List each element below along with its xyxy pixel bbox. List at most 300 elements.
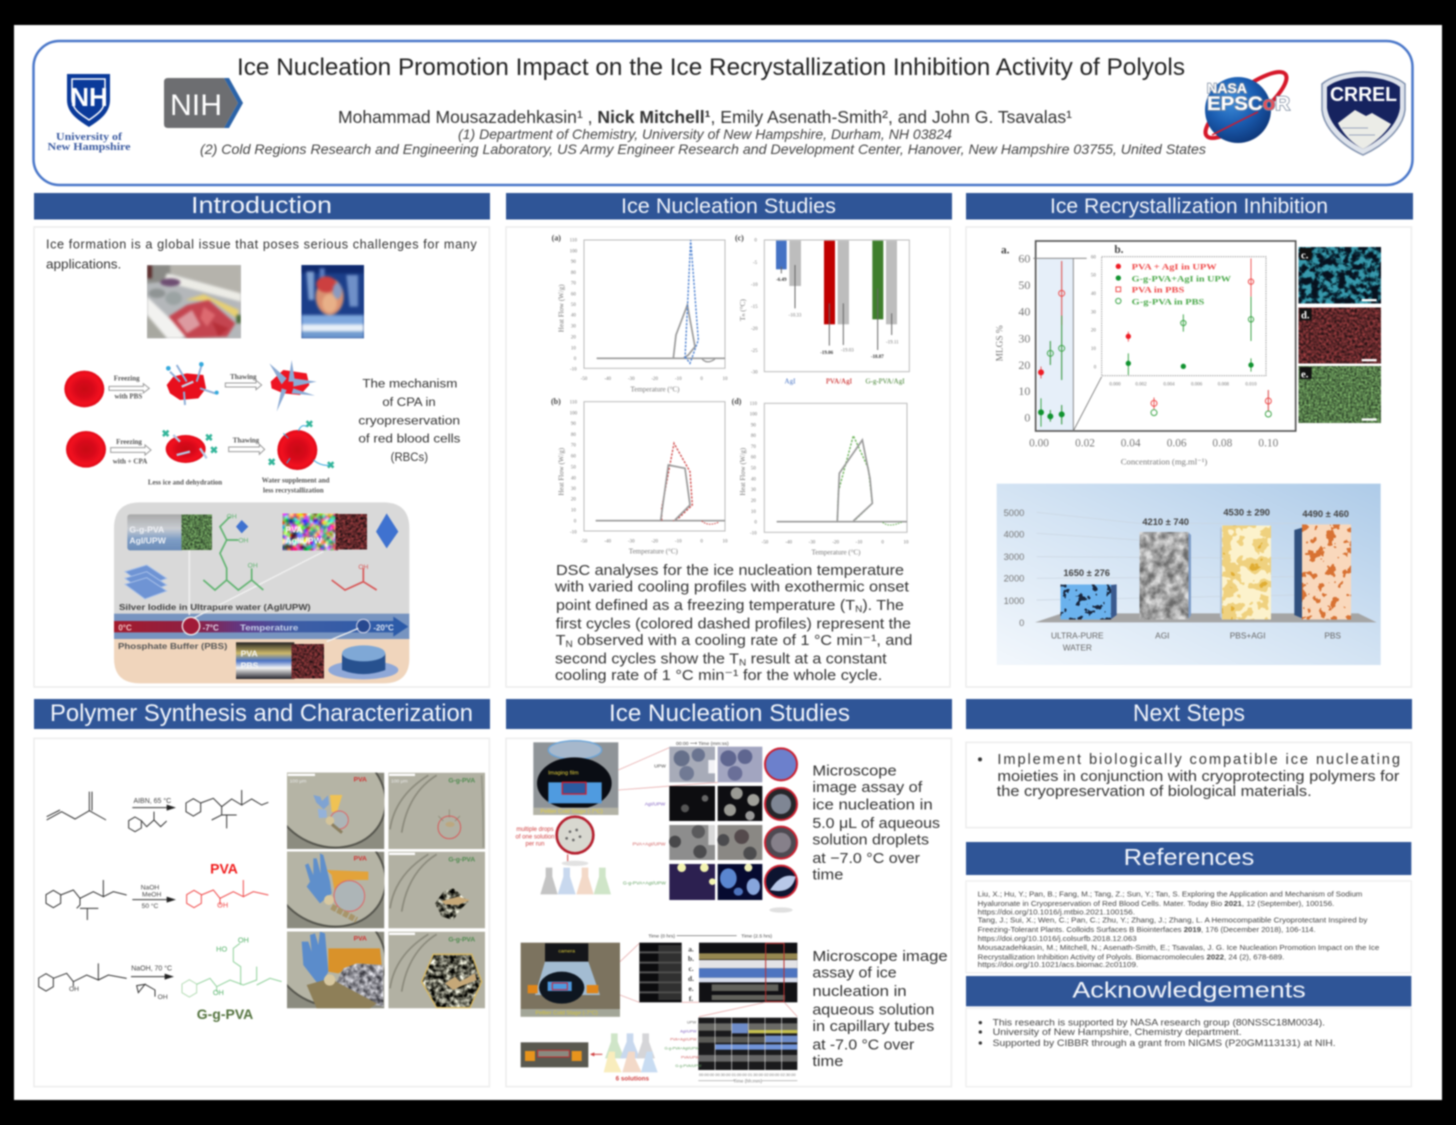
chart: MLGS vs concentration: 0.04 — [1121, 437, 1141, 449]
text: droplet assay: solution droplets — [812, 833, 929, 849]
diagram: RBC mechanism without CPA: Freezing — [114, 375, 140, 383]
chart: MLGS vs concentration: 0.10 — [1258, 437, 1279, 449]
chart: MLGS vs concentration — [995, 241, 1296, 466]
authors: Mohammad Mousazadehkasin¹ , Nick Mitchell¹, Emily Asenath-Smith², and John G. Tsavalas¹ — [338, 107, 1072, 127]
caption: DSC analyses: second cycles show the T — [555, 650, 726, 667]
chart b: DSC: 10 — [723, 539, 728, 544]
references list: Tang, J.; Sui, X.; Wen, C.; Pan, C.; Zhu, Y.; Zhang, J.; Zhang, L. A Hemocompatible Cryoprotectant Inspired by — [978, 916, 1368, 925]
image: PVA PBS: PVA — [241, 649, 259, 659]
text: droplet assay: Microscope — [812, 763, 897, 779]
chart: MLGS vs concentration: b. — [1114, 244, 1124, 256]
chart: MLGS vs concentration: 0.00 — [1029, 437, 1049, 449]
capillary tube images: c. — [688, 964, 694, 973]
chart: nucleation bars: PBS+AGI — [1230, 631, 1266, 641]
section header: Introduction — [34, 192, 490, 220]
micrograph d: d. — [1301, 311, 1310, 322]
capillary tube images: a. — [688, 945, 694, 954]
chart: nucleation bars: 0 — [1019, 618, 1024, 628]
label: G-g-PVA: G-g-PVA — [197, 1006, 253, 1022]
references list — [966, 881, 1411, 973]
caption: DSC analyses: DSC analyses for the ice nucleation temperature — [556, 562, 904, 579]
chart b: DSC: 50 — [571, 465, 576, 470]
chart b: DSC: (b) — [551, 397, 561, 406]
capillary tube images: f. — [689, 994, 693, 1003]
section header: Ice Nucleation Studies: Ice Nucleation Studies — [621, 195, 836, 218]
chart a: DSC: 100 — [570, 249, 578, 254]
section header: Ice Recrystallization Inhibition: Ice Recrystallization Inhibition — [1050, 195, 1328, 218]
intro text: applications. — [46, 257, 121, 271]
chart b: DSC: 0 — [574, 519, 577, 524]
acknowledgements list: University of New Hampshire, Chemistry department. — [993, 1027, 1242, 1037]
diagram: RBC mechanism with CPA: Thawing — [233, 436, 260, 444]
ice crystals — [236, 520, 248, 533]
references list: Freezing-Tolerant Plants. Colloids Surfaces B Biointerfaces 2019, 176 (December 2018), 106-114. — [978, 925, 1316, 934]
acknowledgements heading — [966, 976, 1411, 1006]
diagram: RBC mechanism with CPA: ✖ — [161, 429, 170, 440]
chart d: DSC: -10 — [750, 532, 757, 537]
diagram: RBC mechanism with CPA — [66, 420, 335, 495]
chart a: DSC: Temperature (°C) — [630, 385, 680, 393]
droplet image grid: G-g-PVA+AgI/UPW — [623, 881, 666, 887]
chart c: TN bars: Tₙ (°C) — [738, 298, 747, 321]
diagram: RBC mechanism without CPA: Thawing — [230, 373, 257, 381]
chart d: DSC: 60 — [751, 456, 756, 461]
legend — [1116, 262, 1231, 306]
setup photo: droplets: multiple drops — [516, 827, 554, 833]
chart b: DSC: -40 — [604, 539, 611, 544]
chart c: TN bars: -20 — [751, 327, 758, 332]
references heading: References — [1124, 844, 1254, 870]
micrographs: PVA: 100 μm — [290, 779, 306, 785]
legend: PVA + AgI in UPW — [1132, 262, 1217, 272]
chart: MLGS vs concentration: 0.02 — [1075, 437, 1095, 449]
text: droplet assay: at −7.0 °C over — [812, 851, 920, 867]
caption: DSC analyses: N — [566, 639, 573, 649]
diagram: RBC mechanism with CPA: Freezing — [116, 438, 142, 446]
capillary tube images: Time (2.5 hrs) — [741, 934, 772, 940]
diagram: ice nucleation vs temperature: OH — [358, 564, 369, 571]
diagram: RBC mechanism without CPA — [64, 360, 317, 412]
chart: MLGS vs concentration: 60 — [1018, 251, 1030, 265]
text: droplet assay: 5.0 μL of aqueous — [812, 816, 940, 832]
micrograph e — [1299, 366, 1381, 423]
setup photo: capillary tubes — [521, 943, 620, 1017]
droplet image grid — [623, 741, 762, 900]
capillary time series: PVA+AgI/UPW — [670, 1037, 697, 1042]
header banner — [34, 41, 1412, 185]
caption: mechanism of CPA: The mechanism — [362, 377, 457, 391]
chart a: DSC: 0 — [574, 357, 577, 362]
next steps text: Implement biologically compatible ice nucleating — [997, 752, 1400, 768]
micrographs: G-g-PVA — [388, 773, 485, 1008]
diagram: ice nucleation vs temperature: OH — [227, 513, 237, 520]
chart d: DSC: 10 — [904, 540, 909, 545]
chart d: DSC: 90 — [751, 423, 756, 428]
chart b: DSC: Temperature (°C) — [629, 548, 679, 556]
reaction 3: grafting: NaOH, 70 °C — [131, 965, 172, 973]
chart d: DSC: Temperature (°C) — [811, 549, 861, 557]
chart: nucleation bars: WATER — [1063, 643, 1092, 653]
temperature arrow: Temperature — [240, 623, 299, 632]
diagram: RBC mechanism with CPA: ✖ — [267, 458, 276, 469]
inset chart: 0.000 — [1109, 383, 1121, 388]
chart c: TN bars — [735, 234, 909, 386]
logo: University of New Hampshire: New Hampshire — [48, 142, 131, 153]
chart d: DSC: 100 — [750, 413, 758, 418]
reaction 2: hydrolysis: OH — [217, 901, 228, 910]
caption: DSC analyses: observed with a cooling rate of 1 °C min⁻¹, and — [573, 632, 912, 649]
chart d: DSC: -40 — [785, 540, 792, 545]
image: G-g-PVA: G-g-PVA — [129, 524, 165, 534]
capillary time series: Time (hh:mm) — [733, 1079, 763, 1084]
acknowledgements list: Supported by CIBBR through a grant from NIGMS (P20GM113131) at NIH. — [993, 1038, 1336, 1048]
chart a: DSC: -10 — [570, 368, 577, 373]
chart: MLGS vs concentration: 0.08 — [1212, 437, 1233, 449]
diagram: RBC mechanism with CPA: ✖ — [205, 433, 213, 444]
chart: MLGS vs concentration: 10 — [1018, 384, 1030, 398]
data points — [1038, 261, 1271, 427]
chart: nucleation bars: 4210 ± 740 — [1142, 517, 1189, 527]
chart b: DSC: 0 — [700, 539, 703, 544]
chart b: DSC: Heat Flow (W/g) — [558, 447, 566, 496]
chart c: TN bars: -10.33 — [789, 314, 802, 319]
text: droplet assay: ice nucleation in — [812, 798, 933, 814]
chart d: DSC — [732, 397, 909, 557]
micrographs: PVA: PVA — [354, 856, 367, 863]
chart c: TN bars: -19.11 — [886, 340, 899, 345]
affiliation 2: (2) Cold Regions Research and Engineering Laboratory, US Army Engineer Research and Development Center, Hanover, New Hampshire 03755, United States — [200, 141, 1206, 157]
setup photo: capillary tubes: camera — [558, 948, 575, 954]
logo: NASA EPSCoR: NASA — [1207, 80, 1247, 96]
chart: nucleation bars: PBS — [1324, 631, 1341, 641]
chart a: DSC: 20 — [571, 335, 576, 340]
logo: NIH: NIH — [170, 89, 222, 122]
text: droplet assay: time — [812, 868, 843, 884]
setup photo: droplets: per run — [526, 841, 544, 847]
section header: Next Steps: Next Steps — [1133, 700, 1245, 727]
chart c: TN bars: -18.87 — [871, 355, 884, 360]
reaction 2: hydrolysis: 50 °C — [142, 902, 159, 910]
chart d: DSC: 80 — [751, 434, 756, 439]
text: capillary assay: nucleation in — [812, 984, 907, 1000]
logo: NASA EPSCoR — [1197, 62, 1295, 148]
caption: DSC analyses — [554, 562, 912, 684]
logo: NASA EPSCoR: EPSCoR — [1207, 94, 1290, 115]
diagram: ice nucleation vs temperature: OH — [248, 563, 258, 570]
chart a: DSC: 110 — [570, 239, 577, 244]
chart b: DSC: -50 — [581, 539, 588, 544]
reaction 1: RAFT polymerization — [47, 790, 268, 832]
chart b: DSC — [551, 397, 728, 556]
chart a: DSC: (a) — [552, 234, 561, 243]
panel: next steps, references, acknowledgements — [966, 742, 1411, 1087]
chart c: TN bars: G-g-PVA/AgI — [865, 378, 905, 386]
caption: mechanism of CPA: of CPA in — [382, 395, 436, 409]
diagram: ice nucleation vs temperature — [114, 502, 409, 683]
chart d: DSC: 70 — [751, 445, 756, 450]
chart d: DSC: Heat Flow (W/g) — [739, 447, 747, 496]
label: silver iodide: Silver Iodide in Ultrapure water (AgI/UPW) — [119, 602, 311, 612]
chart c: TN bars: 0 — [754, 239, 757, 244]
chart d: DSC: -30 — [809, 540, 816, 545]
capillary tube images — [639, 934, 797, 1003]
chart a: DSC: -40 — [604, 377, 611, 382]
diagram: RBC mechanism with CPA: less recrystallization — [263, 487, 324, 495]
references list: Mousazadehkasin, M.; Mitchell, N.; Asenath-Smith, E.; Tsavalas, J. G. Ice Nucleation Promotion Impact on the Ice — [978, 943, 1379, 952]
chart a: DSC: 10 — [571, 346, 576, 351]
micrograph c: c. — [1301, 250, 1309, 261]
chart: MLGS vs concentration: 40 — [1018, 305, 1030, 319]
chart a: DSC: 90 — [571, 260, 576, 265]
capillary time series: G-g-PVA+AgI/UPW — [664, 1046, 699, 1051]
chart: nucleation bars: 3000 — [1004, 552, 1024, 562]
image: G-g-PVA — [127, 514, 212, 550]
capillary time series: AgI/UPW — [680, 1028, 697, 1033]
chart d: DSC: 30 — [751, 488, 756, 493]
chart b: DSC: 30 — [571, 487, 576, 492]
panel: polymer synthesis — [34, 726, 489, 1087]
legend: G-g-PVA+AgI in UPW — [1132, 273, 1231, 283]
setup photo: droplets: Imaging film — [548, 770, 579, 776]
references list: https://doi.org/10.1016/j.mtbio.2021.100156. — [978, 907, 1135, 916]
next steps text: moieties in conjunction with cryoprotecting polymers for — [997, 769, 1399, 785]
inset chart: 40 — [1091, 292, 1096, 297]
acknowledgements heading: Acknowledgements — [1072, 978, 1306, 1003]
chart b: DSC: -10 — [570, 530, 577, 535]
chart d: DSC: 10 — [751, 510, 756, 515]
chart a: DSC: 40 — [571, 314, 576, 319]
chart: MLGS vs concentration: 0.06 — [1167, 437, 1187, 449]
inset chart: 60 — [1091, 255, 1096, 260]
chart c: TN bars: -10 — [751, 283, 758, 288]
chart b: DSC: 10 — [571, 509, 576, 514]
affiliation 1: (1) Department of Chemistry, University of New Hampshire, Durham, NH 03824 — [458, 126, 952, 142]
chart: nucleation bars: 5000 — [1004, 508, 1024, 518]
micrographs: PVA — [255, 726, 403, 1025]
inset chart: 0.008 — [1218, 383, 1229, 388]
caption: DSC analyses: with varied cooling profiles with exothermic onset — [554, 579, 910, 596]
structure: G-g-PVA — [203, 517, 263, 590]
chart d: DSC: 40 — [751, 477, 756, 482]
diagram: RBC mechanism with CPA: Water supplement and — [262, 477, 330, 485]
section header: Ice Nucleation Studies — [506, 193, 952, 220]
chart c: TN bars: PVA/AgI — [826, 378, 853, 386]
micrographs: PVA: PVA — [354, 777, 367, 784]
caption: DSC analyses: N — [855, 604, 862, 614]
reaction 3: grafting: OH — [238, 935, 249, 944]
setup photo: capillary tubes: Peltier Cold Stage (-7°C) — [536, 1010, 598, 1016]
chart a: DSC: Heat Flow (W/g) — [558, 284, 566, 332]
icon: flasks, 6 solutions: 6 solutions — [616, 1076, 650, 1083]
section header: Ice Nucleation Studies: Ice Nucleation Studies — [609, 700, 850, 727]
capillary time series: 00:00:00 00:30:00 01:00:00 01:30:00 02:00:00 02:30:00 — [699, 1072, 796, 1077]
chart b: DSC: 60 — [571, 455, 576, 460]
caption: DSC analyses: N — [739, 657, 746, 667]
image: PVA — [283, 514, 367, 550]
chart a: DSC: -10 — [675, 377, 682, 382]
chart b: DSC: -30 — [628, 539, 635, 544]
text: capillary assay: assay of ice — [812, 966, 897, 982]
acknowledgements list: This research is supported by NASA research group (80NSSC18M0034). — [993, 1018, 1325, 1028]
chart a: DSC: 60 — [571, 292, 576, 297]
chart c: TN bars: -6.49 — [776, 278, 787, 283]
next steps text — [966, 742, 1411, 828]
logo: University of New Hampshire: University of — [56, 132, 123, 143]
inset chart: 30 — [1091, 310, 1096, 315]
caption: mechanism of CPA: cryopreservation — [358, 413, 460, 427]
chart b: DSC: -20 — [651, 539, 658, 544]
chart b: DSC: 70 — [571, 444, 576, 449]
chart a: DSC: -20 — [651, 377, 658, 382]
chart b: DSC: 20 — [571, 498, 576, 503]
chart: nucleation bars: 4530 ± 290 — [1223, 508, 1270, 518]
chart d: DSC: 50 — [751, 466, 756, 471]
setup photo: droplets — [516, 741, 618, 866]
inset chart: 20 — [1091, 329, 1096, 334]
caption: mechanism of CPA — [358, 377, 460, 464]
references list: Hyaluronate in Cryopreservation of Red Blood Cells. Mater. Today Bio 2021, 12 (September), 100156. — [978, 899, 1334, 908]
chart: nucleation bars: 1000 — [1004, 596, 1024, 606]
diagram: RBC mechanism without CPA: with PBS — [114, 393, 142, 401]
icon: flasks — [540, 868, 611, 894]
references list: Liu, X.; Hu, Y.; Pan, B.; Fang, M.; Tang, Z.; Sun, Y.; Tan, S. Exploring the Application and Mechanism of Sodium — [978, 890, 1362, 899]
micrographs: G-g-PVA: 100 μm — [391, 779, 408, 785]
logo: University of New Hampshire — [48, 74, 131, 153]
caption: mechanism of CPA: of red blood cells — [358, 432, 460, 446]
capillary tube images: b. — [688, 954, 694, 963]
references list: https://doi.org/10.1016/j.colsurfb.2018.12.063 — [978, 934, 1137, 943]
temperature arrow: 0°C — [118, 623, 132, 632]
text: capillary assay: aqueous solution — [812, 1002, 934, 1018]
capillary tube images: e. — [688, 984, 694, 993]
text: capillary assay: Microscope image — [812, 949, 948, 965]
references heading — [966, 842, 1411, 875]
image: G-g-PVA: AgI/UPW — [129, 535, 167, 545]
panel: ice nucleation DSC — [506, 227, 950, 687]
reaction 3: grafting: HO — [216, 945, 227, 954]
diagram: RBC mechanism with CPA: Less ice and dehydration — [148, 479, 222, 487]
droplet image grid: 00:00 ⟶ Time (mm:ss) — [676, 741, 729, 747]
chart c: TN bars: -25 — [751, 349, 758, 354]
chart d: DSC: 0 — [881, 540, 884, 545]
setup photo: droplets: Peltier Cold Stage (-7°C) — [541, 809, 603, 815]
chart b: DSC: 80 — [571, 433, 576, 438]
chart: MLGS vs concentration: MLGS % — [995, 325, 1005, 361]
label: PVA: PVA — [210, 861, 238, 877]
text: droplet assay — [812, 763, 940, 884]
chart: nucleation bars: ULTRA-PURE — [1051, 631, 1104, 641]
chart a: DSC — [552, 234, 728, 393]
logo: NIH — [164, 78, 243, 128]
caption: mechanism of CPA: (RBCs) — [391, 450, 428, 464]
inset chart: 10 — [1091, 347, 1096, 352]
references list: Recrystallization Inhibition Activity of Polyols. Biomacromolecules 2022, 24 (2), 678-689. — [978, 952, 1284, 961]
chart: MLGS vs concentration: 0 — [1024, 411, 1030, 425]
icon: ice disc — [328, 645, 398, 679]
caption: DSC analyses: T — [556, 632, 565, 649]
references list: https://doi.org/10.1021/acs.biomac.2c01109. — [978, 960, 1138, 969]
diagram: RBC mechanism with CPA: ✖ — [305, 420, 314, 431]
text: capillary assay — [812, 949, 948, 1070]
chart d: DSC: -20 — [832, 540, 839, 545]
chart a: DSC: 0 — [700, 377, 703, 382]
reaction 2: hydrolysis: MeOH — [142, 891, 161, 898]
circular droplet zooms — [765, 748, 797, 913]
chart: MLGS vs concentration: 20 — [1018, 358, 1030, 372]
capillary time series — [664, 1018, 797, 1084]
chart a: DSC: 30 — [571, 325, 576, 330]
capillary tube images: d. — [688, 974, 694, 983]
reaction 3: grafting: OH — [213, 988, 224, 997]
chart b: DSC: 100 — [570, 411, 578, 416]
reaction 3: grafting: OH — [158, 994, 168, 1001]
micrograph e: e. — [1301, 369, 1309, 380]
chart b: DSC: 40 — [571, 476, 576, 481]
chart c: TN bars: AgI — [785, 378, 796, 386]
image: PVA PBS: PBS — [241, 660, 259, 670]
micrographs: G-g-PVA: G-g-PVA — [448, 937, 475, 944]
chart: MLGS vs concentration: 50 — [1018, 278, 1030, 292]
chart c: TN bars: -15 — [751, 305, 758, 310]
capillary tube images: Time (0 hrs) — [648, 934, 675, 940]
next steps text: the cryopreservation of biological materials. — [997, 784, 1312, 800]
sample holder — [521, 1042, 602, 1067]
micrograph d — [1299, 308, 1381, 363]
chart: nucleation bars — [997, 484, 1381, 665]
caption: DSC analyses: first cycles (colored dashed profiles) represent the — [556, 615, 911, 632]
capillary time series: UPW — [687, 1020, 697, 1025]
caption: DSC analyses: result at a constant — [746, 650, 888, 667]
inset chart — [1091, 255, 1266, 388]
legend: G-g-PVA in PBS — [1132, 296, 1205, 306]
chart a: DSC: -50 — [581, 377, 588, 382]
acknowledgements list — [966, 1008, 1411, 1087]
chart: nucleation bars: 4490 ± 460 — [1302, 509, 1349, 519]
logo: CRREL — [1322, 72, 1405, 155]
temperature arrow: -7°C — [203, 623, 219, 632]
chart b: DSC: 90 — [571, 422, 576, 427]
section header: Introduction: Introduction — [191, 192, 332, 218]
intro text: Ice formation is a global issue that poses serious challenges for many — [46, 237, 477, 251]
micrographs: G-g-PVA: G-g-PVA — [448, 778, 475, 785]
inset chart: 0.002 — [1135, 383, 1147, 388]
chart d: DSC: 110 — [750, 402, 757, 407]
capillary time series: G-g-PVA/UPW — [675, 1063, 702, 1068]
chart b: DSC: 110 — [570, 400, 577, 405]
chart c: TN bars: (c) — [735, 234, 744, 243]
caption: DSC analyses: ). The — [862, 597, 904, 614]
chart: nucleation bars: AGI — [1155, 631, 1170, 641]
diagram: RBC mechanism with CPA: with + CPA — [113, 457, 147, 465]
structure: PVA — [332, 568, 377, 590]
icon: AgI sheets — [125, 565, 167, 599]
micrographs: PVA: PVA — [354, 936, 367, 943]
droplet image grid: UPW — [654, 764, 666, 770]
chart a: DSC: 70 — [571, 282, 576, 287]
reaction 2: hydrolysis: NaOH — [141, 884, 159, 891]
chart: nucleation bars: 1650 ± 276 — [1063, 568, 1110, 578]
icon: flasks, 6 solutions — [604, 1033, 658, 1083]
reaction 1: RAFT polymerization: AIBN, 65 °C — [133, 797, 171, 805]
temperature arrow — [114, 614, 409, 639]
temperature arrow: -20°C — [373, 623, 394, 632]
chart d: DSC: 0 — [754, 521, 757, 526]
chart a: DSC: -30 — [628, 377, 635, 382]
inset chart: 0.004 — [1163, 383, 1175, 388]
chart a: DSC: 80 — [571, 271, 576, 276]
chart d: DSC: (d) — [732, 397, 742, 406]
chart: MLGS vs concentration: Concentration (mg.ml⁻¹) — [1121, 456, 1207, 466]
